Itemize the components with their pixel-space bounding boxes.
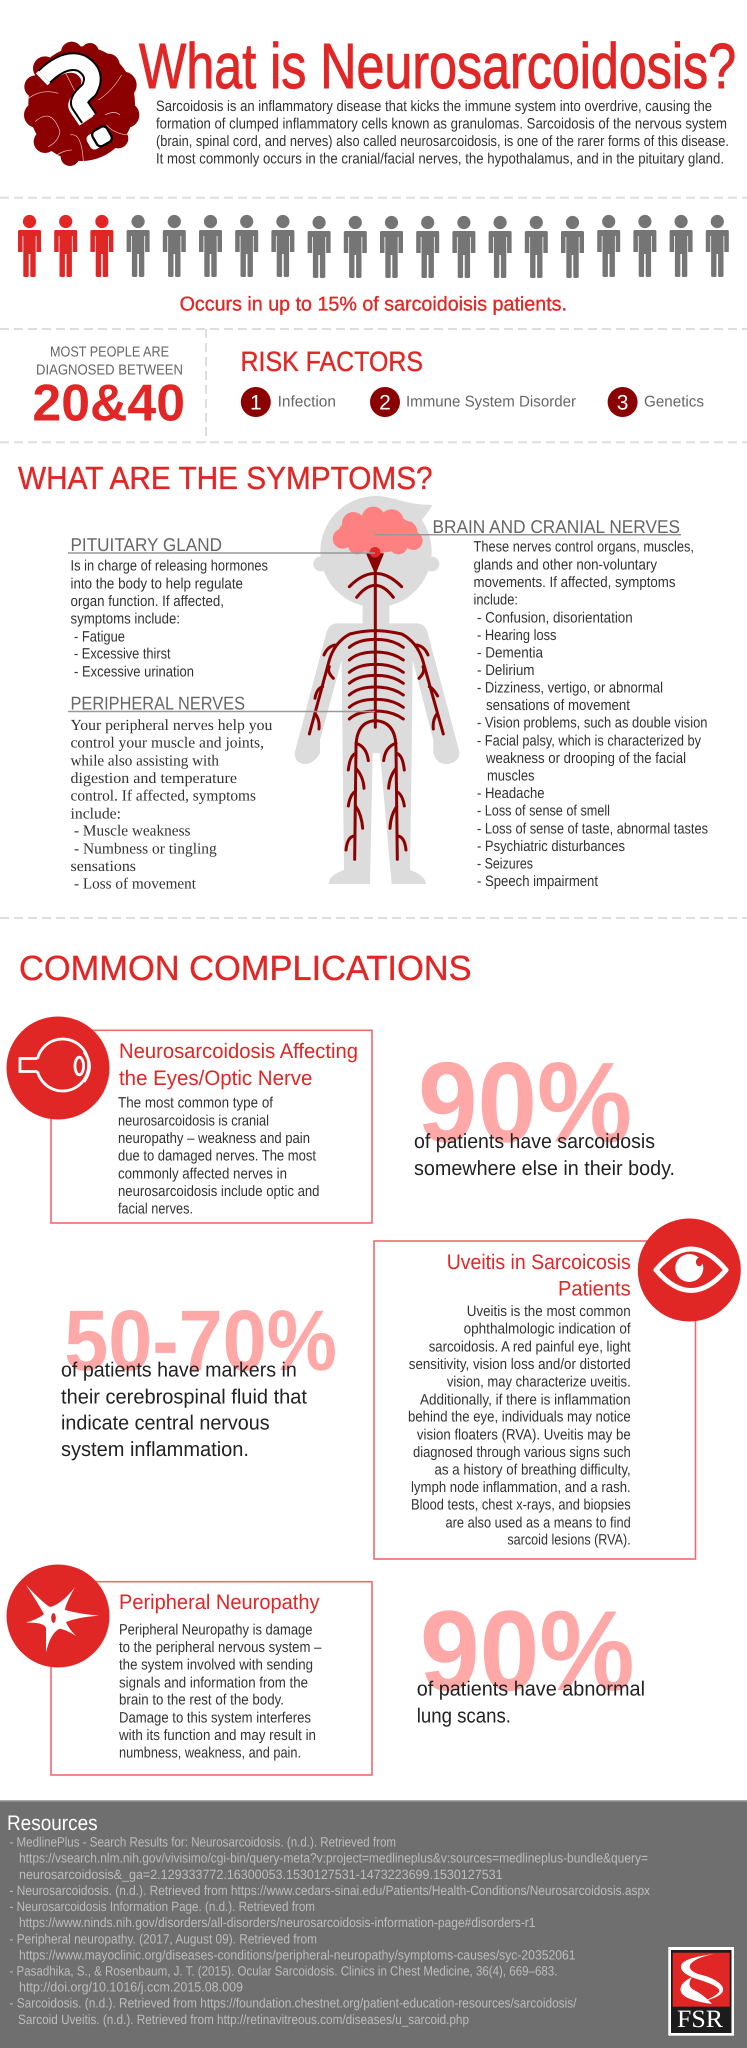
icon: neuron [26,1585,99,1653]
panel: eyes and optic nerve: the Eyes/Optic Nerve [119,1067,312,1090]
callout: peripheral nerves: control. If affected, symptoms [70,788,256,805]
callout: pituitary gland: - Excessive thirst [74,646,171,663]
callout: peripheral nerves: - Muscle weakness [74,823,190,840]
statistic: 90% abnormal lung scans: of patients have abnormal [417,1678,645,1701]
panel: resources: https://www.ninds.nih.gov/disorders/all-disorders/neurosarcoidosis-information-page#disorders-r1 [19,1915,536,1930]
statistic: 50-70% markers: system inflammation. [61,1438,249,1461]
intro paragraph [156,98,729,168]
panel: risk factors: 1 [250,392,262,414]
panel: resources: http://doi.org/10.1016/j.ccm.2015.08.009 [19,1980,243,1995]
panel: peripheral neuropathy: Peripheral Neuropathy [119,1591,320,1614]
callout: peripheral nerves: sensations [70,858,136,875]
panel: risk factors: Genetics [644,394,704,411]
pictogram: 3 of 20 people highlighted [18,215,729,278]
panel: peripheral neuropathy [6,1564,372,1775]
panel: eyes and optic nerve: Neurosarcoidosis Affecting [119,1040,358,1063]
logo: FSR [668,1947,734,2036]
callout: brain and cranial nerves: - Psychiatric disturbances [477,838,625,855]
panel: peripheral neuropathy: Damage to this system interferes [119,1709,311,1726]
callout: pituitary gland: - Excessive urination [74,663,194,680]
callout: peripheral nerves: - Numbness or tingling [74,840,217,857]
callout: brain and cranial nerves: glands and other non-voluntary [474,556,657,573]
statistic: 90% abnormal lung scans: 90% [420,1588,635,1715]
callout: brain and cranial nerves [375,516,708,890]
callout: brain and cranial nerves: - Confusion, disorientation [477,609,633,626]
panel: uveitis: vision, may characterize uveitis. [447,1374,631,1391]
panel: diagnosis age: DIAGNOSED BETWEEN [36,362,183,378]
panel: peripheral neuropathy: Peripheral Neuropathy is damage [119,1621,312,1638]
statistic: 90% sarcoidosis elsewhere: of patients have sarcoidosis [414,1130,655,1153]
callout: peripheral nerves: - Loss of movement [74,876,197,893]
panel: resources: - Peripheral neuropathy. (2017, August 09). Retrieved from [10,1931,317,1946]
panel: eyes and optic nerve: neuropathy – weakness and pain [118,1130,310,1147]
heading: complications: COMMON COMPLICATIONS [19,949,472,988]
callout: pituitary gland: - Fatigue [74,628,125,645]
callout: brain and cranial nerves: weakness or drooping of the facial [485,750,686,767]
statistic: 90% sarcoidosis elsewhere: somewhere else in their body. [414,1157,675,1180]
icon: eye [656,1249,726,1290]
panel: uveitis: diagnosed through various signs such [413,1444,631,1461]
panel: uveitis: Uveitis is the most common [467,1303,631,1320]
panel: resources: neurosarcoidosis&_ga=2.129333772.16300053.1530127531-1473223699.1530127531 [19,1867,503,1882]
callout: brain and cranial nerves: sensations of movement [486,697,631,714]
panel: diagnosis age: MOST PEOPLE ARE [50,345,169,361]
callout: pituitary gland: into the body to help regulate [70,575,243,592]
callout: brain and cranial nerves: - Seizures [477,856,533,873]
panel: eyes and optic nerve: neurosarcoidosis include optic and [118,1183,320,1200]
callout: brain and cranial nerves: muscles [487,767,534,784]
callout: brain and cranial nerves: movements. If affected, symptoms [474,574,676,591]
icon: brain with question mark [24,42,139,166]
panel: resources: - Sarcoidosis. (n.d.). Retrieved from https://foundation.chestnet.org/patient-education-resources/sarcoidosis/ [10,1996,577,2011]
panel: diagnosis age: 20&40 [32,375,185,433]
callout: brain and cranial nerves: - Vision problems, such as double vision [477,715,708,732]
callout: peripheral nerves: include: [70,805,121,822]
callout: pituitary gland: Is in charge of releasing hormones [70,558,268,575]
panel: uveitis: Additionally, if there is inflammation [420,1391,631,1408]
statistic: 90% abnormal lung scans: lung scans. [417,1704,511,1727]
body diagram with nervous system [295,496,459,884]
statistic: 50-70% markers: of patients have markers in [61,1359,297,1382]
panel: uveitis: vision floaters (RVA). Uveitis may be [417,1426,631,1443]
callout: brain and cranial nerves: - Delirium [477,662,534,679]
callout: peripheral nerves: Your peripheral nerves help you [70,717,273,734]
callout: pituitary gland: PITUITARY GLAND [70,534,222,555]
callout: brain and cranial nerves: - Headache [477,785,544,802]
panel: resources: - Neurosarcoidosis. (n.d.). Retrieved from https://www.cedars-sinai.edu/Patients/Health-Conditions/Neurosarcoidosis.aspx [10,1883,650,1898]
panel: uveitis: Uveitis in Sarcoicosis [447,1251,631,1274]
panel: resources: - Neurosarcoidosis Information Page. (n.d.). Retrieved from [10,1899,315,1914]
panel: peripheral neuropathy: to the peripheral nervous system – [119,1639,322,1656]
statistic: 50-70% markers: indicate central nervous [61,1412,270,1435]
callout: brain and cranial nerves: - Hearing loss [477,627,556,644]
callout: brain and cranial nerves: BRAIN AND CRANIAL NERVES [432,516,680,537]
panel: risk factors: 2 [379,392,391,414]
callout: brain and cranial nerves: - Loss of sense of smell [477,803,610,820]
statistic: 50-70% markers: their cerebrospinal fluid that [61,1385,307,1408]
panel: resources: Resources [7,1812,98,1835]
panel: resources: - MedlinePlus - Search Results for: Neurosarcoidosis. (n.d.). Retrieved from [10,1835,396,1850]
panel: eyes and optic nerve: facial nerves. [118,1200,193,1217]
panel: risk factors [240,346,704,417]
panel: uveitis: sensitivity, vision loss and/or distorted [409,1356,631,1373]
panel: uveitis: sarcoidosis. A red painful eye, light [429,1338,631,1355]
panel: uveitis: sarcoid lesions (RVA). [507,1532,631,1549]
panel: risk factors: Immune System Disorder [406,394,576,411]
panel: peripheral neuropathy: with its function and may result in [118,1727,316,1744]
panel: eyes and optic nerve: The most common type of [118,1095,274,1112]
panel: eyes and optic nerve: commonly affected nerves in [118,1165,287,1182]
heading: symptoms: WHAT ARE THE SYMPTOMS? [18,460,433,496]
callout: pituitary gland [68,534,375,680]
callout: brain and cranial nerves: include: [474,592,518,609]
callout: pituitary gland: symptoms include: [70,611,180,628]
statistic: 50-70% markers: 50-70% [64,1293,337,1389]
panel: uveitis: lymph node inflammation, and a rash. [411,1479,631,1496]
icon: eye cross-section [20,1039,90,1091]
callout: pituitary gland: organ function. If affected, [70,593,224,610]
panel: resources: Sarcoid Uveitis. (n.d.). Retrieved from http://retinavitreous.com/diseases/u_sarcoid.php [18,2012,469,2027]
callout: brain and cranial nerves: - Dementia [477,644,544,661]
panel: uveitis: ophthalmologic indication of [464,1321,631,1338]
callout: brain and cranial nerves: - Dizziness, vertigo, or abnormal [477,680,663,697]
statistic: 90% sarcoidosis elsewhere: 90% [418,1040,632,1167]
panel: resources: https://vsearch.nlm.nih.gov/vivisimo/cgi-bin/query-meta?v:project=medlineplus&v:sources=medlineplus-bundle&query= [19,1851,648,1866]
panel: risk factors: RISK FACTORS [240,346,423,377]
panel: risk factors: Infection [278,394,336,411]
panel: uveitis: behind the eye, individuals may notice [408,1409,631,1426]
callout: brain and cranial nerves: These nerves control organs, muscles, [474,539,694,556]
panel: peripheral neuropathy: signals and information from the [119,1674,308,1691]
panel: uveitis: are also used as a means to find [446,1514,631,1531]
panel: uveitis: Blood tests, chest x-rays, and biopsies [411,1497,631,1514]
callout: peripheral nerves: while also assisting with [70,752,219,769]
callout: peripheral nerves: control your muscle and joints, [70,735,264,752]
logo: FSR: FSR [677,2006,723,2033]
panel: resources: - Pasadhika, S., & Rosenbaum, J. T. (2015). Ocular Sarcoidosis. Clinics in Chest Medicine, 36(4), 669–683. [10,1964,557,1979]
panel: uveitis: as a history of breathing difficulty, [434,1462,631,1479]
callout: brain and cranial nerves: - Facial palsy, which is characterized by [477,732,701,749]
panel: uveitis [374,1218,741,1559]
callout: peripheral nerves [68,692,375,893]
panel: peripheral neuropathy: brain to the rest of the body. [119,1692,284,1709]
statistic: 50-70% markers [61,1293,337,1461]
panel: eyes and optic nerve: neurosarcoidosis is cranial [118,1112,269,1129]
callout: brain and cranial nerves: - Loss of sense of taste, abnormal tastes [477,820,708,837]
panel: resources [0,1800,747,2048]
panel: risk factors: 3 [617,392,628,414]
panel: eyes and optic nerve: due to damaged nerves. The most [118,1148,317,1165]
panel: peripheral neuropathy: the system involved with sending [119,1657,313,1674]
panel: resources: https://www.mayoclinic.org/diseases-conditions/peripheral-neuropathy/symptoms-causes/syc-20352061 [19,1948,576,1963]
callout: brain and cranial nerves: - Speech impairment [477,873,599,890]
panel: peripheral neuropathy: numbness, weakness, and pain. [119,1745,301,1762]
panel: eyes and optic nerve [6,1016,372,1223]
callout: peripheral nerves: PERIPHERAL NERVES [70,692,245,713]
panel: uveitis: Patients [558,1278,631,1301]
callout: peripheral nerves: digestion and temperature [70,770,237,787]
panel: diagnosis age [32,345,185,433]
statistic caption: Occurs in up to 15% of sarcoidoisis patients. [180,294,567,316]
